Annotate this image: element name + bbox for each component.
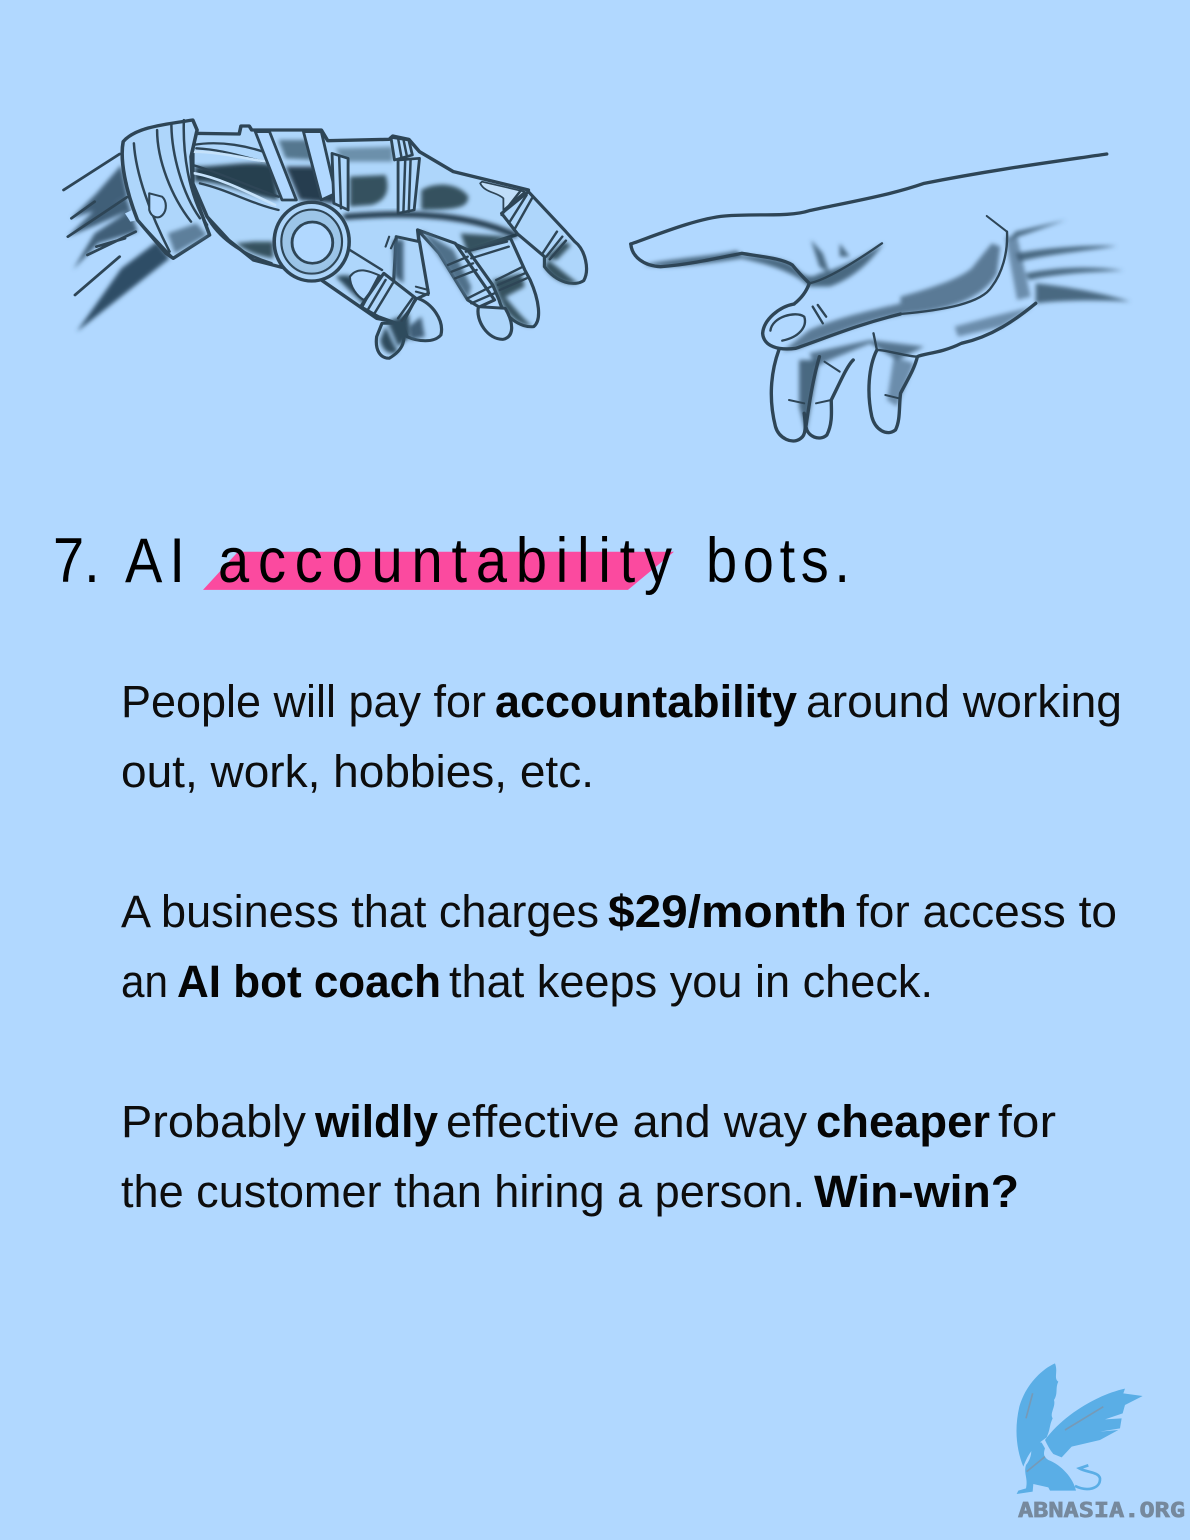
paragraph: accountability: out, work, hobbies, etc. [121, 746, 594, 797]
paragraph: win-win: wildly [314, 1096, 438, 1147]
griffin wings [1016, 1363, 1058, 1467]
heading text: number and AI: 7. [53, 525, 100, 596]
paragraph: accountability [121, 676, 1122, 797]
heading word: bots: bots. [706, 525, 850, 596]
forearm lines and shading [64, 154, 170, 332]
paragraph: pricing: that keeps you in check. [449, 956, 933, 1007]
paragraph: win-win [121, 1096, 1056, 1217]
heading text: number and AI: AI [125, 525, 192, 596]
paragraph: win-win: Probably [121, 1096, 307, 1147]
joint ring [274, 202, 349, 281]
paragraph: pricing: A business that charges [121, 886, 599, 937]
paragraph: pricing: an [121, 956, 168, 1007]
paragraph: win-win: Win-win? [814, 1166, 1019, 1217]
paragraph: win-win: for [998, 1096, 1056, 1147]
griffin body [1017, 1440, 1076, 1494]
paragraph: accountability: accountability [495, 676, 797, 727]
logo: griffin mark [1016, 1363, 1143, 1494]
paragraph: accountability: People will pay for [121, 676, 486, 727]
cuff [122, 120, 210, 258]
hand shading [644, 220, 1130, 433]
illustration: robot hand [64, 120, 586, 358]
hand body [193, 126, 528, 323]
illustration: human hand [631, 154, 1130, 441]
highlight swash [203, 552, 674, 590]
fingers [361, 190, 586, 358]
heading [53, 525, 674, 596]
paragraph: pricing [121, 886, 1117, 1007]
paragraph: win-win: effective and way [446, 1096, 808, 1147]
hand outline [631, 154, 1107, 441]
paragraph: win-win: cheaper [816, 1096, 990, 1147]
paragraph: pricing: AI bot coach [177, 956, 441, 1007]
paragraph: pricing: $29/month [608, 886, 847, 937]
griffin tail [1075, 1465, 1100, 1489]
paragraph: accountability: around working [806, 676, 1122, 727]
paragraph: win-win: the customer than hiring a person. [121, 1166, 805, 1217]
paragraph: pricing: for access to [856, 886, 1117, 937]
logo: wordmark: ABNASIA.ORG [1018, 1498, 1185, 1522]
heading word: accountability: accountability [218, 525, 672, 596]
